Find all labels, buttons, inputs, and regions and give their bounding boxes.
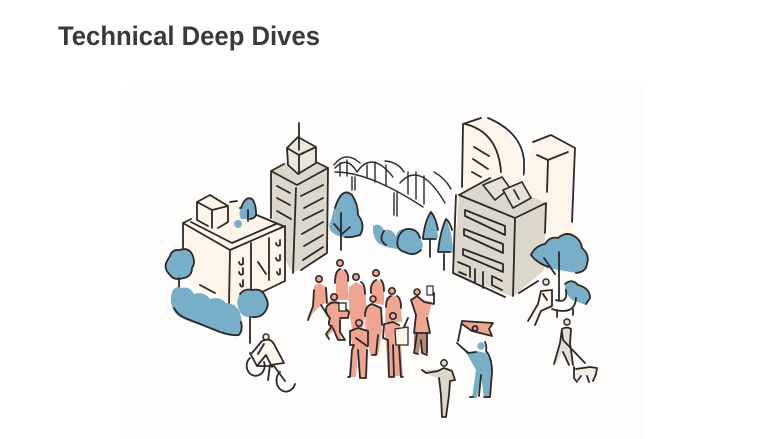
cyclist bbox=[247, 334, 295, 392]
person: mid right bbox=[385, 288, 402, 322]
person: seated on bench bbox=[528, 279, 552, 325]
grey office building bbox=[453, 178, 546, 297]
person: front right with clipboard bbox=[383, 313, 408, 377]
flag bbox=[462, 321, 493, 336]
illustration: city scene bbox=[127, 83, 643, 439]
bench bbox=[552, 290, 576, 317]
hedge: lower left bbox=[171, 287, 242, 335]
person: pointing, grey bbox=[422, 360, 455, 417]
person: blue with flag bbox=[457, 321, 493, 398]
illustration background bbox=[127, 83, 643, 439]
tower crown and antenna bbox=[287, 123, 316, 174]
tree: left bbox=[166, 249, 194, 288]
cone tree right bbox=[438, 218, 453, 270]
tree: centre bbox=[329, 192, 363, 250]
person: walking left bbox=[307, 276, 328, 320]
clipboard bbox=[395, 327, 408, 345]
bush by bench bbox=[565, 281, 590, 305]
dog bbox=[574, 366, 597, 382]
tree: right large bbox=[531, 234, 588, 300]
bridge bbox=[334, 157, 451, 216]
tree: street bbox=[237, 290, 268, 343]
person: walking the dog bbox=[554, 319, 585, 365]
person: centre bbox=[365, 296, 382, 355]
low cream building bbox=[183, 200, 285, 305]
person: taking a photo bbox=[411, 286, 434, 355]
person: with tablet bbox=[326, 294, 349, 340]
person: back middle bbox=[349, 274, 367, 330]
rooftop box bbox=[197, 195, 237, 228]
person: front left, arms crossed bbox=[348, 320, 368, 378]
cone tree left bbox=[423, 212, 438, 257]
rooftop tree bbox=[234, 198, 256, 228]
tall grey tower bbox=[271, 155, 328, 273]
row of bushes bbox=[373, 225, 423, 254]
curved cream tower bbox=[462, 117, 524, 200]
title: Technical Deep Dives bbox=[58, 21, 320, 51]
square cream tower bbox=[523, 135, 575, 240]
solar panels bbox=[483, 177, 531, 208]
person: back right bbox=[371, 270, 384, 305]
person: back tall bbox=[335, 260, 349, 300]
bicycle wheels bbox=[247, 353, 295, 392]
